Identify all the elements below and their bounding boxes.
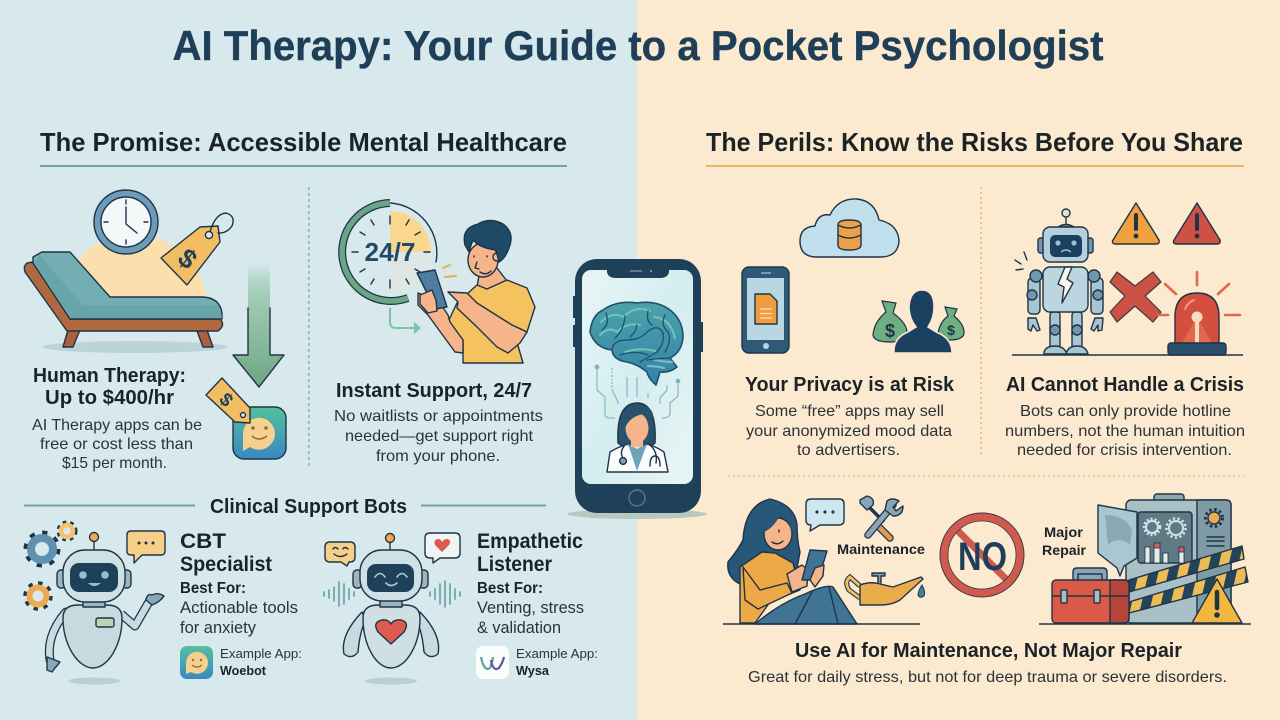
icon: cloud database bbox=[800, 199, 899, 257]
illustration: central phone with brain and doctor bbox=[567, 259, 707, 519]
text: maintenance not major repair bbox=[748, 640, 1227, 686]
text: human therapy cost: $15 per month. bbox=[62, 455, 167, 472]
text: instant support: from your phone. bbox=[376, 448, 500, 465]
background: promise side bbox=[0, 0, 637, 720]
title: AI Therapy: Your Guide to a Pocket Psychologist bbox=[172, 22, 1104, 69]
text: human therapy cost: AI Therapy apps can be bbox=[32, 417, 202, 434]
icon: data buyer and money bags bbox=[873, 290, 964, 353]
icon: alarm siren bbox=[1158, 272, 1240, 355]
text: privacy risk bbox=[745, 374, 955, 459]
arrow: cost drop bbox=[233, 263, 284, 387]
icon: toolbox bbox=[1052, 568, 1129, 623]
icon: no sign bbox=[940, 513, 1024, 597]
text: instant support: Instant Support, 24/7 bbox=[336, 380, 532, 402]
text: CBT specialist: Specialist bbox=[180, 552, 272, 576]
text: privacy risk: your anonymized mood data bbox=[746, 423, 952, 440]
icon: Woebot app bbox=[180, 646, 213, 679]
heading: clinical support bots: Clinical Support Bots bbox=[210, 496, 407, 518]
text: CBT specialist bbox=[180, 529, 298, 637]
text: human therapy cost: Human Therapy: bbox=[33, 365, 186, 387]
icon: broken robot bbox=[1015, 209, 1103, 354]
text: empathetic listener: Best For: bbox=[477, 580, 543, 597]
text: human therapy cost: free or cost less than bbox=[40, 436, 193, 453]
illustration: man using phone bbox=[417, 220, 535, 363]
text: empathetic listener: & validation bbox=[477, 618, 561, 637]
text: crisis: needed for crisis intervention. bbox=[1017, 442, 1232, 459]
icon: app with small price tag bbox=[206, 378, 286, 459]
heading: the perils: The Perils: Know the Risks Before You Share bbox=[706, 127, 1243, 157]
text: CBT specialist: Actionable tools bbox=[180, 598, 298, 617]
text: privacy risk: Some “free” apps may sell bbox=[755, 403, 944, 420]
icon: brain bbox=[590, 302, 683, 385]
label: major repair: Repair bbox=[1042, 542, 1087, 558]
text: example app Woebot bbox=[220, 646, 302, 678]
text: example app Wysa: Wysa bbox=[516, 663, 550, 678]
icon: empathetic robot bbox=[324, 533, 460, 684]
text: example app Wysa bbox=[516, 646, 598, 678]
text: crisis: numbers, not the human intuition bbox=[1005, 423, 1245, 440]
icon: therapy couch with clock and price tag: $ bbox=[172, 242, 203, 275]
text: privacy risk: to advertisers. bbox=[797, 442, 900, 459]
icon: app with small price tag: $ bbox=[214, 389, 237, 412]
icon: data lines bbox=[595, 365, 680, 418]
panel: the perils bbox=[706, 127, 1251, 686]
illustration: broken machine bbox=[1098, 494, 1231, 623]
text: crisis: AI Cannot Handle a Crisis bbox=[1006, 374, 1244, 396]
illustration: woman using phone bbox=[728, 499, 857, 624]
text: example app Woebot: Example App: bbox=[220, 646, 302, 661]
text: privacy risk: Your Privacy is at Risk bbox=[745, 374, 955, 396]
text: human therapy cost: Up to $400/hr bbox=[45, 387, 174, 409]
background: perils side bbox=[637, 0, 1280, 720]
icon: phone with document bbox=[742, 267, 789, 353]
icon: therapy couch with clock and price tag bbox=[24, 190, 233, 353]
text: empathetic listener: Venting, stress bbox=[477, 598, 584, 617]
text: CBT specialist: Best For: bbox=[180, 580, 246, 597]
label: major repair bbox=[1042, 524, 1087, 558]
text: example app Woebot: Woebot bbox=[220, 663, 267, 678]
icon: doctor bbox=[607, 403, 668, 472]
text: instant support: needed—get support right bbox=[345, 428, 534, 445]
text: empathetic listener: Listener bbox=[477, 552, 553, 576]
icon: warning triangles bbox=[1112, 203, 1220, 244]
text: instant support bbox=[334, 380, 543, 465]
text: crisis: Bots can only provide hotline bbox=[1020, 403, 1231, 420]
text: maintenance not major repair: Great for daily stress, but not for deep trauma or severe disorders. bbox=[748, 669, 1227, 686]
icon: 24/7 clock bbox=[342, 203, 437, 334]
icon: CBT robot bbox=[27, 524, 165, 684]
icon: data buyer and money bags: $ bbox=[885, 321, 895, 341]
icon: warning triangle bbox=[1192, 579, 1242, 623]
icon: oil can bbox=[847, 573, 925, 605]
text: instant support: No waitlists or appointments bbox=[334, 408, 543, 425]
text: CBT specialist: CBT bbox=[180, 529, 226, 553]
heading: the promise: The Promise: Accessible Mental Healthcare bbox=[40, 127, 567, 157]
text: maintenance not major repair: Use AI for Maintenance, Not Major Repair bbox=[795, 640, 1182, 662]
text: example app Wysa: Example App: bbox=[516, 646, 598, 661]
panel: the promise bbox=[24, 127, 598, 684]
label: major repair: Major bbox=[1044, 524, 1084, 540]
text: human therapy cost bbox=[32, 365, 202, 472]
icon: data buyer and money bags: $ bbox=[947, 322, 955, 338]
text: empathetic listener: Empathetic bbox=[477, 529, 583, 553]
icon: Wysa app bbox=[476, 646, 509, 679]
icon: caution tape bbox=[1129, 546, 1248, 613]
icon: 24/7 clock: 24/7 bbox=[364, 237, 416, 267]
icon: no sign: NO bbox=[958, 535, 1007, 579]
label: maintenance: Maintenance bbox=[837, 541, 925, 557]
text: CBT specialist: for anxiety bbox=[180, 618, 256, 637]
icon: wrench and screwdriver bbox=[860, 496, 903, 538]
icon: chat bubble bbox=[806, 499, 844, 531]
text: empathetic listener bbox=[477, 529, 584, 637]
icon: red X bbox=[1110, 272, 1161, 322]
text: crisis bbox=[1005, 374, 1245, 459]
